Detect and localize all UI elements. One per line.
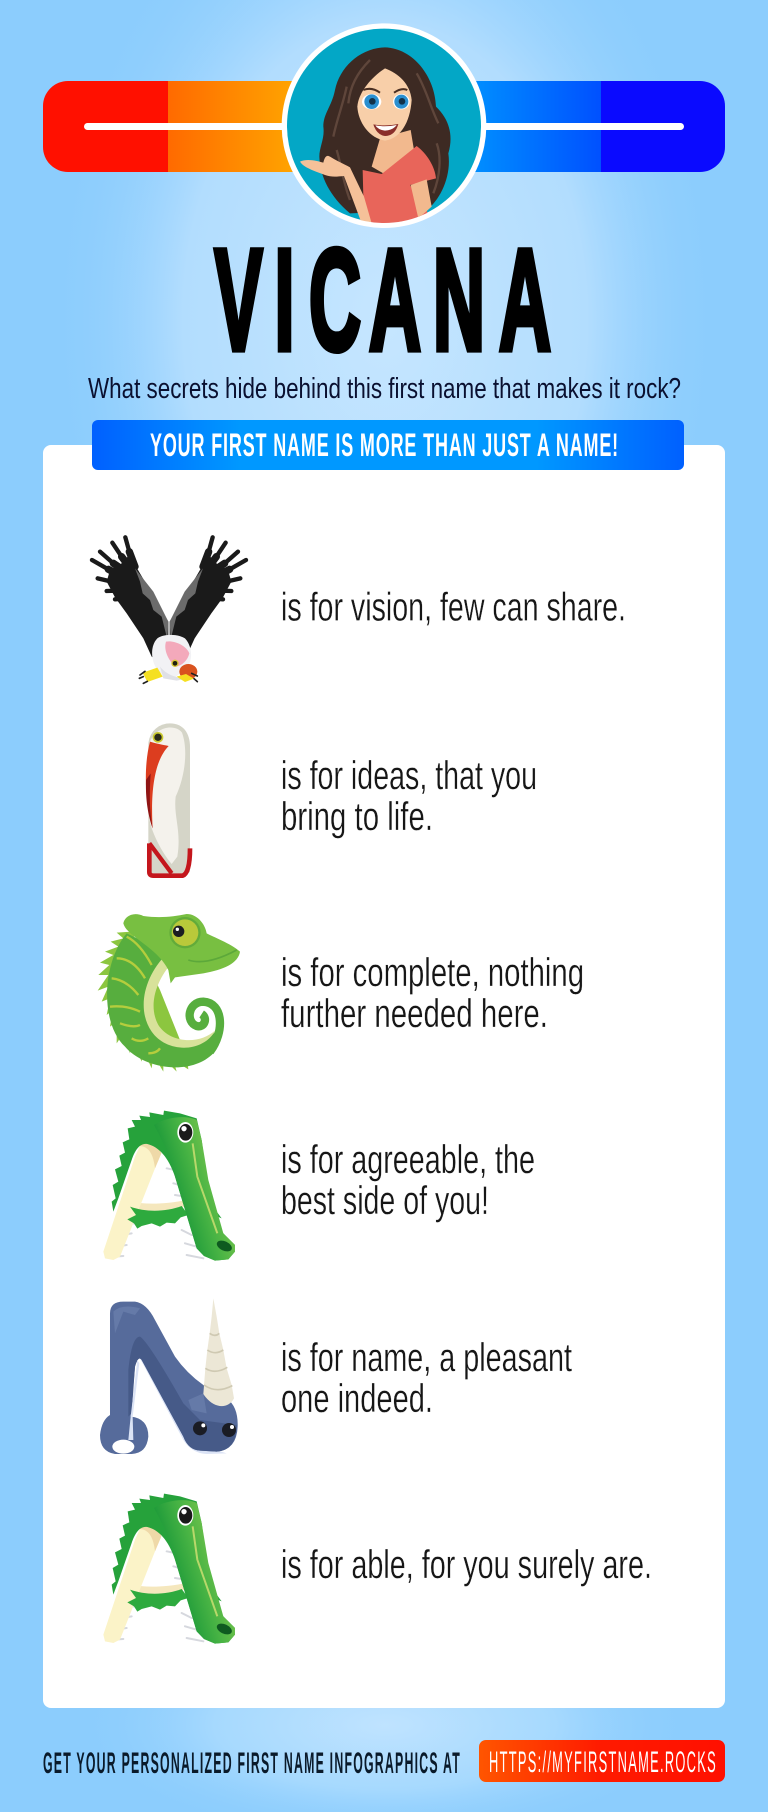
text: N lines: one indeed. [281,1377,433,1421]
text: V line: is for vision, few can share. [281,586,626,630]
letter A: crocodile [103,1111,235,1261]
letter C: chameleon [98,914,240,1072]
text: C lines: is for complete, nothing [281,951,584,995]
letter N: narwhal [100,1298,238,1454]
footer url button [479,1740,725,1782]
text: N lines: is for name, a pleasant [281,1336,572,1380]
text: C lines [281,951,584,1036]
banner [92,420,684,470]
text: I lines [281,754,537,839]
text: I lines: is for ideas, that you [281,754,537,798]
header colour bar [43,81,725,172]
white content panel [43,445,725,1708]
text: C lines: further needed here. [281,992,548,1036]
title: VICANA [215,220,551,381]
letter I: stork [146,723,190,877]
text: N lines [281,1336,572,1421]
text: A lines [281,1138,535,1223]
letter A: crocodile (second) [103,1494,235,1644]
avatar: smiling woman in circle [282,23,486,228]
text: A lines: best side of you! [281,1179,489,1223]
text: I lines: bring to life. [281,795,433,839]
letter V: vulture [92,537,246,683]
text: A lines: is for agreeable, the [281,1138,535,1182]
